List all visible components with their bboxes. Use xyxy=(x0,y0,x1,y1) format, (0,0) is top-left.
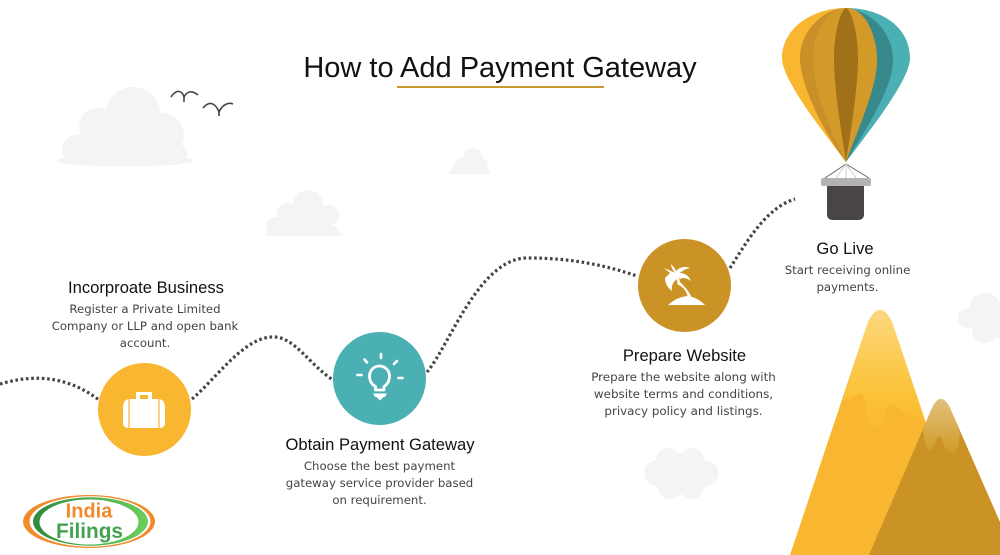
step 3 text xyxy=(591,370,776,418)
step 1 circle: briefcase xyxy=(98,363,191,456)
title: How to Add Payment Gateway xyxy=(303,52,697,84)
step 3 text: privacy policy and listings. xyxy=(604,404,763,418)
mountain: left xyxy=(790,310,935,555)
cloud: right edge xyxy=(958,293,1000,343)
balloon xyxy=(782,8,910,220)
logo: India xyxy=(66,500,113,522)
cloud: small center xyxy=(448,148,490,174)
birds xyxy=(171,91,233,116)
step 4 heading: Go Live xyxy=(816,239,874,258)
dotted path xyxy=(0,199,795,400)
logo: Filings xyxy=(56,520,123,543)
step 1 text: Company or LLP and open bank xyxy=(52,319,238,333)
step 2 circle: light bulb xyxy=(333,332,426,425)
logo xyxy=(23,495,155,548)
step 3 heading: Prepare Website xyxy=(623,346,746,365)
step 2 text: gateway service provider based xyxy=(286,476,473,490)
cloud: large top left xyxy=(57,87,193,166)
step 1 heading: Incorproate Business xyxy=(68,278,224,297)
step 2 text xyxy=(286,459,473,507)
cloud: medium center xyxy=(265,190,342,236)
step 2 text: on requirement. xyxy=(332,493,427,507)
step 4 text xyxy=(785,263,910,294)
mountain: right xyxy=(869,399,1000,555)
step 4 text: Start receiving online xyxy=(785,263,910,277)
step 3 text: website terms and conditions, xyxy=(594,387,773,401)
cloud: bottom center xyxy=(644,448,718,499)
step 1 text xyxy=(52,302,238,350)
step 2 text: Choose the best payment xyxy=(304,459,455,473)
step 1 text: account. xyxy=(120,336,170,350)
step 4 text: payments. xyxy=(816,280,879,294)
step 2 heading: Obtain Payment Gateway xyxy=(285,435,475,454)
title underline xyxy=(397,86,604,88)
step 1 text: Register a Private Limited xyxy=(69,302,221,316)
step 3 circle: palm island xyxy=(638,239,731,332)
step 3 text: Prepare the website along with xyxy=(591,370,776,384)
